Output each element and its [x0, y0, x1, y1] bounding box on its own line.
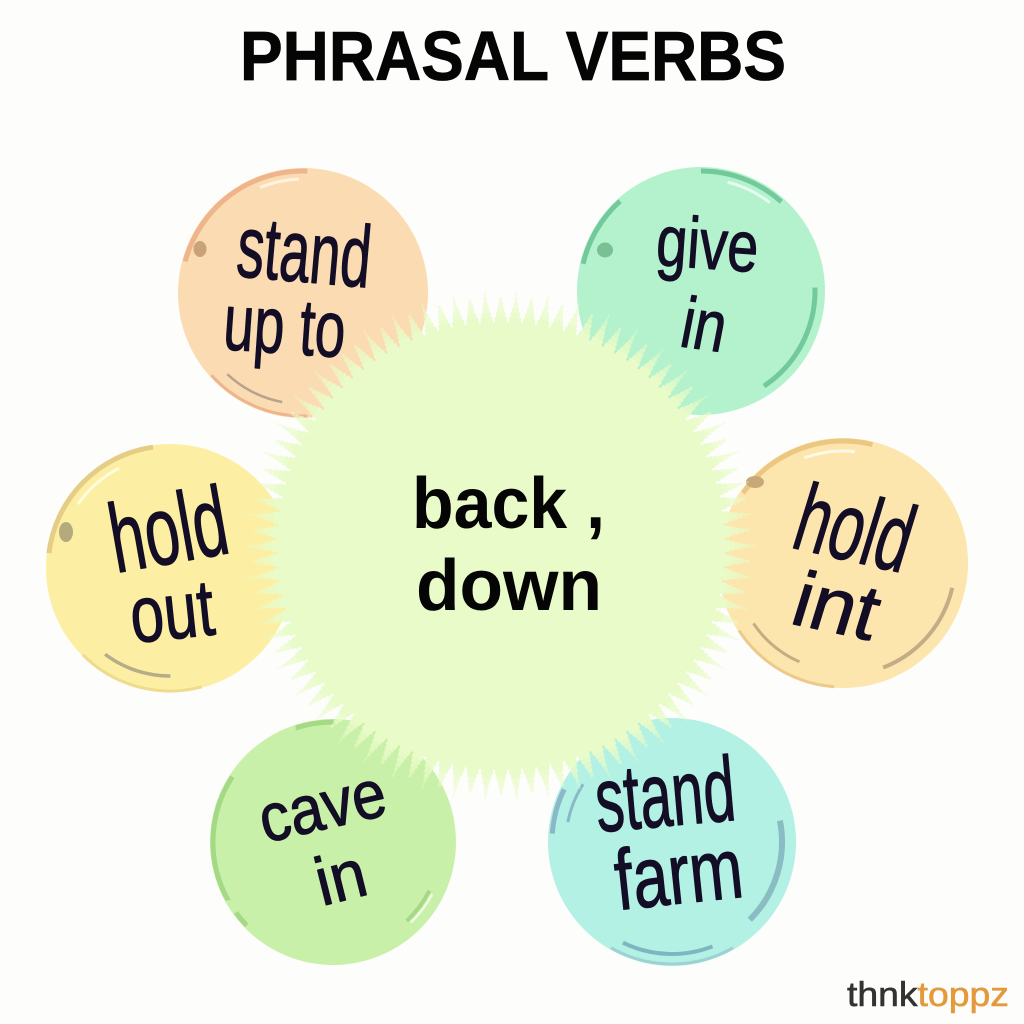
label: hold int: int	[783, 555, 891, 657]
label: cave in: cave	[251, 755, 393, 858]
label: hold out: hold	[101, 465, 236, 594]
label: stand up to: stand	[233, 196, 375, 307]
label: give in	[654, 201, 761, 368]
label: hold int: hold	[783, 465, 927, 593]
bubble: cave in	[163, 672, 503, 1012]
title: PHRASAL VERBS	[240, 17, 786, 95]
label: stand farm: stand	[591, 738, 739, 852]
label: hold out: out	[125, 563, 218, 660]
logo: thnktoppz: thnktoppz	[847, 976, 1009, 1014]
bubble: hold int	[673, 393, 1013, 733]
bubble: stand up to	[154, 144, 452, 442]
label: stand farm	[591, 738, 747, 929]
center starburst	[249, 294, 753, 798]
label: stand farm: farm	[610, 820, 747, 929]
label: give in: give	[654, 201, 761, 288]
label: stand up to: up to	[221, 277, 349, 374]
label: stand up to	[221, 196, 375, 374]
label: hold int	[783, 465, 927, 657]
center text: back , down: back ,	[412, 464, 605, 544]
label: give in: in	[675, 283, 734, 368]
center text: back , down: down	[416, 546, 602, 626]
label: cave in: in	[307, 835, 374, 921]
label: hold out	[101, 465, 236, 660]
bubble: stand farm	[505, 675, 839, 1009]
bubble: give in	[556, 146, 846, 436]
label: cave in	[251, 755, 393, 921]
bubble: hold out	[14, 412, 326, 724]
center text: back , down	[412, 464, 605, 626]
